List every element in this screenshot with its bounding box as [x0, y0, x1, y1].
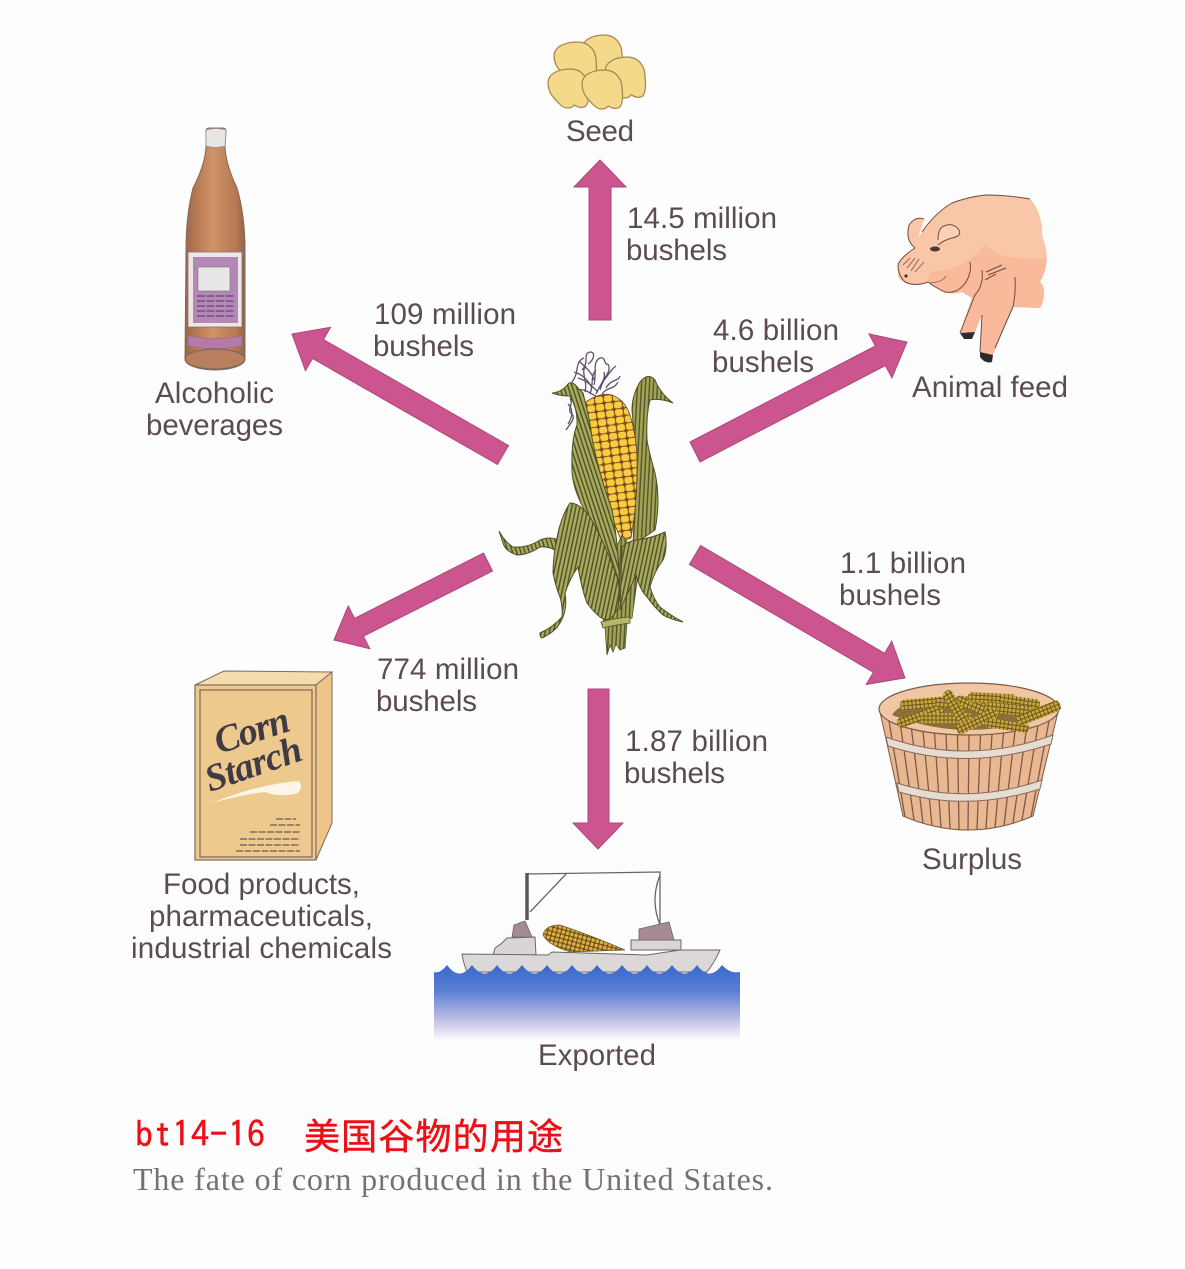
corn: silk: [566, 352, 620, 434]
box: white swoosh: [212, 781, 301, 803]
water: [434, 965, 740, 1040]
label: Alcoholic beverages: beverages: [146, 409, 283, 442]
label: 1.1 billion bushels: 1.1 billion: [840, 547, 966, 580]
box: Corn Starch wordmark: Corn: [209, 699, 295, 763]
label: 774 million bushels: bushels: [376, 685, 477, 718]
ship: left cabin: [493, 937, 536, 955]
icon: bottle: [185, 128, 245, 370]
corn: kernels: [586, 394, 637, 542]
label: 1.87 billion bushels: [624, 725, 768, 790]
icon: ear of corn: [499, 352, 683, 655]
label: 14.5 million bushels: bushels: [626, 234, 727, 267]
arrow: to exported: [573, 689, 623, 849]
label: 109 million bushels: bushels: [373, 330, 474, 363]
corn: left lower husk: [540, 503, 619, 638]
icon: pig: [898, 195, 1047, 362]
icon: corn starch box: [195, 671, 332, 860]
tub: lower band: [897, 780, 1042, 801]
label: 14.5 million bushels: [626, 202, 777, 267]
label: Exported: Exported: [538, 1039, 656, 1072]
label: 4.6 billion bushels: [712, 314, 839, 379]
label: Food products, pharmaceuticals, industrial chemicals: Food products,: [163, 868, 360, 901]
arrow: to seed: [574, 160, 626, 320]
label: Seed: Seed: [566, 115, 634, 148]
arrow: to surplus: [689, 546, 905, 684]
label: 1.1 billion bushels: bushels: [839, 579, 941, 612]
corn: right lower husk: [620, 532, 683, 622]
caption: red Chinese heading: bt14-16: [135, 1116, 265, 1152]
corn: base band and stem: [605, 623, 627, 655]
caption: English subtitle: The fate of corn produced in the United States.: [133, 1161, 773, 1197]
box: small print: [236, 819, 300, 851]
icon: wooden tub of corn: [879, 683, 1062, 830]
ship: ear of corn cargo: [543, 925, 625, 952]
label: 4.6 billion bushels: 4.6 billion: [713, 314, 839, 347]
icon: cargo ship on water: [434, 872, 740, 1040]
label: 774 million bushels: [376, 653, 519, 718]
ship: right cabin: [631, 940, 681, 950]
corn: left tail leaf: [499, 531, 558, 555]
arrow: to alcoholic beverages: [292, 327, 508, 464]
corn: left back husk: [552, 383, 620, 612]
label: Animal feed: Animal feed: [912, 371, 1068, 404]
tub: ears of corn: [896, 688, 1062, 735]
tub: upper band: [886, 735, 1053, 759]
label: Surplus: Surplus: [922, 843, 1022, 876]
label: 1.87 billion bushels: 1.87 billion: [625, 725, 768, 758]
label: Alcoholic beverages: [146, 377, 283, 442]
label: 4.6 billion bushels: bushels: [712, 346, 814, 379]
tub: staves: [889, 721, 1049, 830]
label: 109 million bushels: 109 million: [374, 298, 516, 331]
label: Alcoholic beverages: Alcoholic: [155, 377, 274, 410]
arrow: to food products: [334, 553, 492, 649]
icon: corn seed kernels: [548, 35, 646, 109]
label: 1.1 billion bushels: [839, 547, 966, 612]
label: 14.5 million bushels: 14.5 million: [627, 202, 777, 235]
label: 774 million bushels: 774 million: [377, 653, 519, 686]
label: Food products, pharmaceuticals, industrial chemicals: pharmaceuticals,: [149, 900, 373, 933]
ship: hull: [462, 950, 720, 972]
arrow: to animal feed: [690, 334, 907, 462]
label: Food products, pharmaceuticals, industrial chemicals: [131, 868, 392, 965]
ship: rigging: [527, 872, 660, 925]
caption: red Chinese heading: 美国谷物的用途: [304, 1116, 563, 1157]
label: 109 million bushels: [373, 298, 516, 363]
caption: red Chinese heading: [135, 1116, 563, 1157]
corn: right back husk: [632, 376, 673, 545]
box: Corn Starch wordmark: Starch: [199, 728, 307, 801]
label: 1.87 billion bushels: bushels: [624, 757, 725, 790]
label: Food products, pharmaceuticals, industrial chemicals: industrial chemicals: [131, 932, 392, 965]
corn: central lower husk: [596, 535, 640, 622]
